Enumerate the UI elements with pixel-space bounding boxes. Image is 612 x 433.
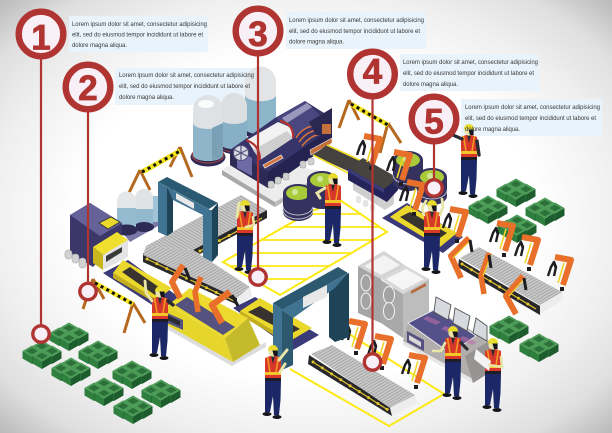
- callout 5: 5: [424, 102, 444, 142]
- callout 2: 2: [78, 69, 98, 108]
- barrel 1: [283, 184, 313, 221]
- panel: text 4 background: [400, 54, 539, 91]
- worker: with paper: [474, 338, 502, 412]
- worker: centre-left: [234, 200, 254, 274]
- barricade: lower left: [83, 279, 145, 333]
- money cluster left 3: [78, 340, 118, 369]
- pipe stubs: [268, 158, 314, 188]
- right leg: [203, 210, 212, 262]
- arm: [400, 182, 423, 216]
- money cluster right 2: [468, 196, 508, 224]
- robot arms behind right belt: [490, 223, 571, 291]
- money cluster left 4: [52, 358, 90, 386]
- yellow robot machine: [165, 288, 266, 366]
- text block 1: dolore magna aliqua.: [72, 43, 127, 49]
- text block 5: Lorem ipsum dolor sit amet, consectetur adipisicing: [465, 105, 600, 111]
- barricade: upper right: [339, 100, 401, 153]
- money cluster right 6: [520, 334, 558, 362]
- right conveyor belt: [458, 247, 563, 315]
- teal arch 1: [158, 177, 218, 262]
- floor markings: lower yellow zone: [290, 334, 444, 426]
- laptops: [434, 297, 487, 341]
- text block 2: Lorem ipsum dolor sit amet, consectetur adipisicing: [119, 73, 254, 79]
- beam front: [282, 273, 348, 318]
- teal arch 2: [273, 267, 349, 370]
- arm: [402, 355, 425, 389]
- purple panel: [175, 297, 235, 335]
- text block 2: elit, sed do eiusmod tempor incididunt ut labore et: [119, 84, 250, 90]
- control console: [403, 297, 503, 383]
- top face: [273, 267, 348, 310]
- white cylinder: [246, 121, 293, 160]
- text block 5: elit, sed do eiusmod tempor incididunt ut labore et: [465, 116, 596, 122]
- yellow tray 2: [233, 297, 319, 350]
- worker: centre: [317, 173, 342, 247]
- control panel: [309, 108, 332, 155]
- arch top face: [158, 177, 218, 209]
- yellow slot: [99, 217, 120, 229]
- text block 2: [119, 73, 254, 101]
- arm: [342, 321, 365, 355]
- left leg: [273, 303, 282, 370]
- arm: [548, 257, 571, 291]
- L-shaped conveyor belt: [143, 195, 267, 307]
- mixer machine: [222, 101, 332, 207]
- text block 3: [289, 18, 424, 46]
- barrel 2: [307, 171, 337, 209]
- left leg: [158, 182, 167, 236]
- text block 2: dolore magna aliqua.: [119, 95, 174, 101]
- white base: [165, 322, 266, 366]
- left face: [167, 305, 233, 362]
- robot arms at lower belt: [342, 136, 466, 389]
- text block 5: dolore magna aliqua.: [465, 127, 520, 133]
- top face: [168, 288, 248, 338]
- arm: [515, 237, 538, 271]
- text block 4: dolore magna aliqua.: [403, 82, 458, 88]
- arm: [443, 209, 466, 243]
- text block 3: Lorem ipsum dolor sit amet, consectetur adipisicing: [289, 18, 424, 24]
- purple cylinder: [277, 101, 322, 138]
- panel: text 1 background: [69, 16, 208, 52]
- dome 3: [243, 66, 277, 139]
- money cluster right 3: [526, 198, 564, 226]
- barrel 3: [393, 151, 423, 191]
- text block 1: Lorem ipsum dolor sit amet, consectetur adipisicing: [72, 22, 207, 28]
- worker: top right: [453, 124, 479, 198]
- barrel 4: [417, 168, 447, 205]
- dome 1: [190, 95, 226, 166]
- machine body: [230, 101, 332, 188]
- beam with sign: [167, 187, 209, 218]
- barricade: upper left: [127, 147, 192, 197]
- purple block: [70, 203, 122, 267]
- callout 3: 3: [248, 15, 268, 54]
- robot arms in front of right belt: [451, 238, 526, 314]
- callout 3: [236, 9, 280, 285]
- yellow tray 1: [103, 260, 180, 310]
- panel: text 3 background: [286, 12, 426, 49]
- text block 4: Lorem ipsum dolor sit amet, consectetur adipisicing: [403, 60, 538, 66]
- text block 4: [403, 60, 538, 88]
- floor markings: hatched yellow zone: [223, 200, 387, 295]
- money stacks: [22, 178, 564, 424]
- dome 2: [219, 93, 249, 154]
- callout 2: [66, 65, 110, 300]
- panel: text 5 background: [461, 99, 602, 136]
- yellow unit: [93, 232, 128, 270]
- arm: [368, 336, 391, 370]
- small domes: [116, 189, 162, 236]
- worker: arms raised: [422, 199, 443, 274]
- callout 1: 1: [31, 18, 51, 58]
- arm: [357, 136, 380, 170]
- callout 4: 4: [363, 52, 383, 92]
- side display: [165, 312, 183, 330]
- text block 1: [72, 22, 207, 49]
- robot arms on machine: [172, 265, 238, 323]
- money cluster left 2: [22, 340, 62, 369]
- worker: console left: [433, 326, 467, 400]
- money cluster right 5: [490, 316, 528, 344]
- callout 1: [19, 12, 63, 342]
- callout 5: [412, 97, 456, 196]
- wheel and stand: [234, 146, 252, 176]
- money cluster left 6: [84, 378, 124, 406]
- money cluster left 5: [112, 360, 152, 389]
- cabinet fans: [361, 275, 394, 320]
- money cluster left 1: [50, 322, 88, 351]
- small dome base strip: [122, 218, 165, 242]
- worker: raised hand left: [145, 281, 173, 360]
- money cluster left 7: [142, 380, 180, 408]
- yellow tray 3: [382, 203, 463, 253]
- arm: [490, 223, 513, 257]
- lower conveyor belt: [308, 345, 417, 416]
- left machine unit: [65, 189, 165, 270]
- worker: bottom centre: [262, 345, 287, 419]
- platform: [222, 155, 325, 207]
- money cluster right 4: [498, 214, 536, 243]
- conveyor end box: [348, 158, 398, 211]
- money cluster left 8: [114, 396, 152, 424]
- panel: text 2 background: [115, 68, 255, 105]
- orange vents: [296, 126, 320, 146]
- right leg: [329, 273, 349, 342]
- orange name plate: [263, 155, 283, 168]
- text block 5: [465, 105, 600, 133]
- dark conveyor: [313, 145, 366, 175]
- glass domes group: [190, 66, 277, 166]
- money cluster right 1: [496, 178, 536, 207]
- text block 4: elit, sed do eiusmod tempor incididunt ut labore et: [403, 71, 534, 77]
- text block 3: dolore magna aliqua.: [289, 40, 344, 46]
- right face: [225, 318, 260, 362]
- white pipe feet: [65, 250, 86, 268]
- arm: [387, 152, 410, 186]
- callout 4: [350, 52, 395, 370]
- text block 1: elit, sed do eiusmod tempor incididunt ut labore et: [72, 32, 203, 38]
- server cabinets: [358, 251, 429, 338]
- text block 3: elit, sed do eiusmod tempor incididunt ut labore et: [289, 29, 420, 35]
